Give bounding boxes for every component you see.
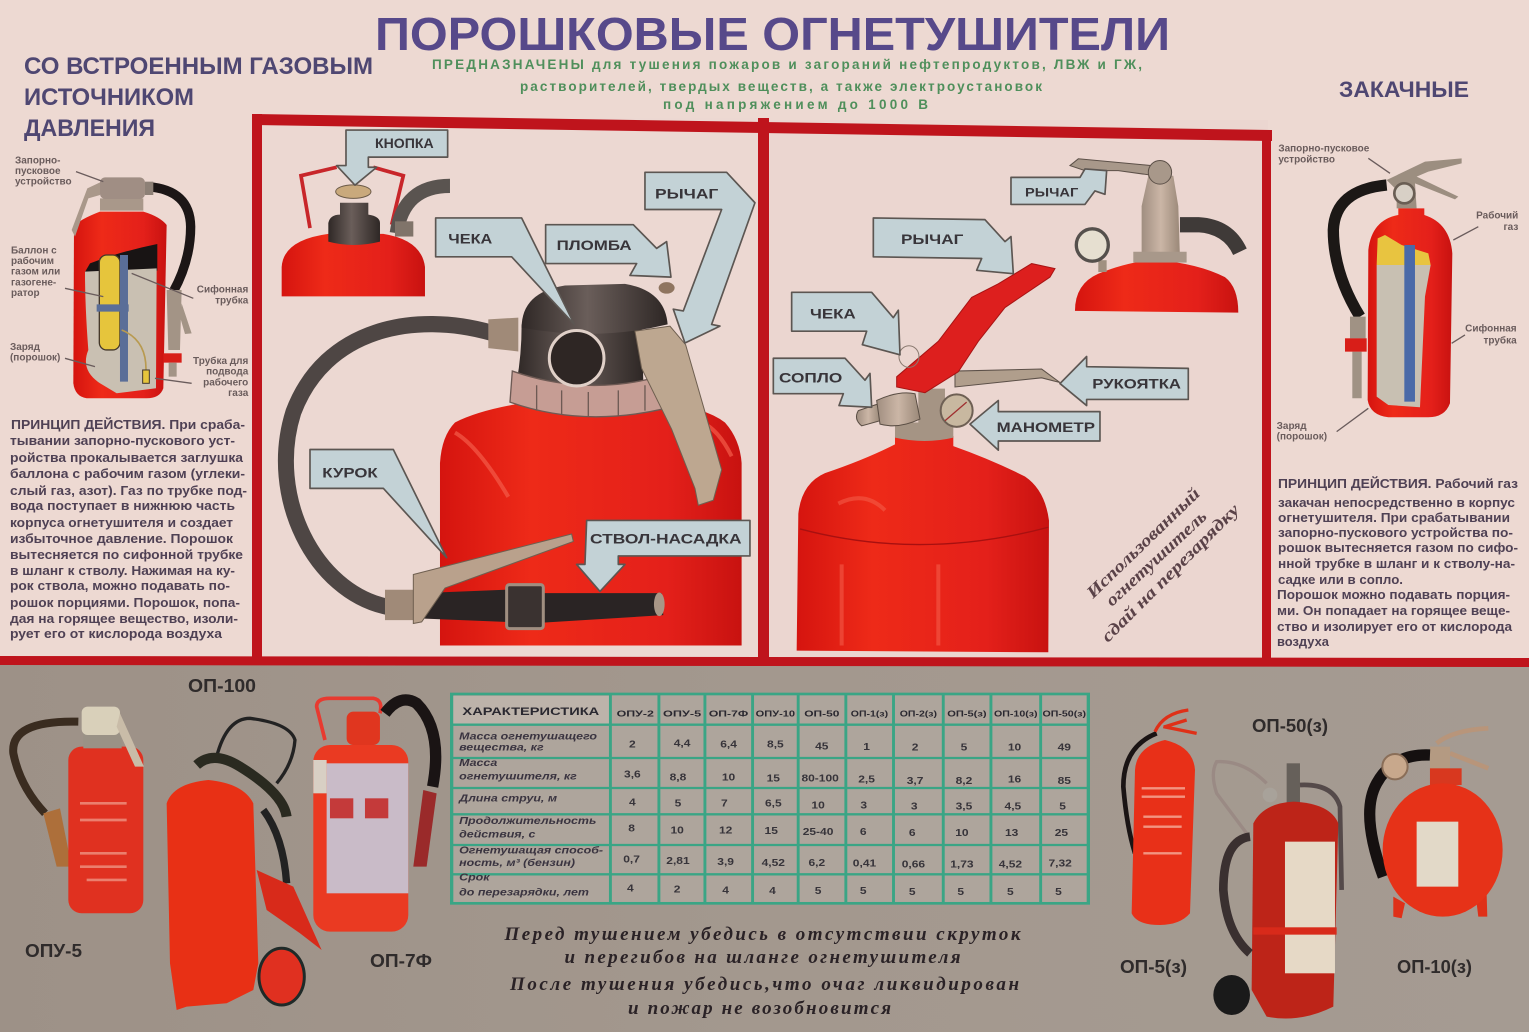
row: jet length: 7 bbox=[721, 799, 728, 809]
row: recharge period: 4 bbox=[627, 884, 634, 894]
row: extinguisher mass: 8,2 bbox=[956, 776, 972, 787]
labels: (порошок) bbox=[1277, 432, 1327, 443]
handle bbox=[955, 369, 1060, 387]
row: agent mass: 4,4 bbox=[674, 739, 690, 749]
panel: stored-cartridge extinguisher head bbox=[282, 130, 755, 646]
labels: рабочим bbox=[11, 255, 54, 267]
callout: сопло: СОПЛО bbox=[779, 370, 842, 386]
labels: left photos: ОПУ-5 bbox=[25, 941, 82, 961]
gas cylinder bbox=[99, 255, 120, 350]
labels: Рабочий bbox=[1476, 209, 1518, 221]
row: duration: 25-40 bbox=[803, 827, 833, 838]
principle text: left: корпуса огнетушителя и создает bbox=[10, 515, 233, 530]
warning text: Перед тушением убедись в отсутствии скруток bbox=[504, 924, 1022, 945]
table header: ОП-10(з) bbox=[994, 710, 1038, 719]
principle text: left: ройства прокалывается заглушка bbox=[10, 450, 244, 465]
labels bbox=[1277, 144, 1518, 443]
row: agent mass: Масса огнетушащего bbox=[459, 731, 597, 742]
callout: чека bbox=[436, 218, 574, 324]
purpose text bbox=[432, 57, 1142, 112]
principle text: right: ми. Он попадает на горящее веще- bbox=[1277, 603, 1510, 618]
principle text: left: рок ствола, можно подавать по- bbox=[10, 578, 230, 593]
row: agent mass: 49 bbox=[1058, 743, 1071, 753]
row: duration: 15 bbox=[765, 826, 778, 837]
table grid bbox=[452, 694, 1088, 903]
table header: ОП-50 bbox=[804, 710, 840, 719]
rotated note: Использованный bbox=[1082, 484, 1204, 603]
icon: hose bbox=[1333, 185, 1387, 317]
principle text: right: ство и изолирует его от кислорода bbox=[1277, 619, 1513, 634]
row: recharge period: 5 bbox=[860, 886, 867, 897]
title: ПОРОШКОВЫЕ ОГНЕТУШИТЕЛИ bbox=[375, 8, 1170, 60]
callout: пломба bbox=[546, 225, 671, 277]
principle text: left: ПРИНЦИП ДЕЙСТВИЯ. При сраба- bbox=[11, 417, 245, 432]
labels: пусковое bbox=[15, 166, 61, 177]
working gas bbox=[1377, 235, 1431, 265]
hose fittings bbox=[385, 318, 518, 620]
callout: пломба: ПЛОМБА bbox=[557, 238, 632, 253]
row: jet length: 5 bbox=[1059, 801, 1066, 812]
photo: ОП-5(з) bbox=[1123, 710, 1197, 925]
callout: манометр: МАНОМЕТР bbox=[997, 420, 1095, 435]
row: recharge period bbox=[459, 873, 1062, 898]
panel: center left background bbox=[258, 118, 762, 658]
head lower bbox=[517, 324, 643, 390]
characteristics table bbox=[452, 694, 1088, 903]
head and lever bbox=[72, 182, 143, 237]
heading: left type: ДАВЛЕНИЯ bbox=[24, 115, 155, 142]
row: capacity: ность, м³ (бензин) bbox=[459, 858, 575, 869]
labels: Запорно-пусковое bbox=[1278, 144, 1370, 155]
row: extinguisher mass: Масса bbox=[459, 758, 497, 769]
callout: манометр bbox=[970, 400, 1100, 450]
table header: ОП-5(з) bbox=[947, 710, 987, 719]
labels: right photos: ОП-10(з) bbox=[1397, 957, 1472, 977]
callout: кнопка: КНОПКА bbox=[375, 136, 434, 151]
labels: left photos: ОП-7Ф bbox=[370, 951, 432, 971]
principle text: left: вода поступает в нижнюю часть bbox=[10, 498, 235, 513]
labels: газогене- bbox=[11, 277, 56, 288]
row: agent mass: 5 bbox=[961, 743, 967, 753]
row: extinguisher mass bbox=[459, 758, 1071, 787]
table header: ХАРАКТЕРИСТИКА bbox=[462, 705, 599, 718]
collar and valve bbox=[895, 389, 953, 441]
row: duration: 10 bbox=[670, 825, 684, 836]
principle text: right: садке или в сопло. bbox=[1278, 572, 1403, 587]
labels: left photos: ОП-100 bbox=[188, 676, 256, 696]
table header: ОП-50(з) bbox=[1043, 710, 1086, 719]
table header: ОП-7Ф bbox=[709, 710, 748, 719]
row: capacity: 0,41 bbox=[853, 859, 876, 869]
row: jet length: 3,5 bbox=[956, 801, 972, 812]
seam bbox=[800, 527, 1048, 545]
principle text: right: рошок вытесняется газом по сифо- bbox=[1278, 540, 1518, 555]
principle text: right: нной трубке в шланг и к стволу-на- bbox=[1278, 556, 1515, 571]
warning text bbox=[504, 924, 1022, 1019]
leader lines bbox=[65, 172, 193, 383]
row: extinguisher mass: 80-100 bbox=[801, 774, 839, 784]
row: duration: 13 bbox=[1005, 828, 1018, 839]
collar ticks bbox=[537, 385, 645, 416]
labels: Запорно- bbox=[15, 155, 60, 166]
row: recharge period: 2 bbox=[674, 885, 680, 895]
nozzle bbox=[422, 590, 663, 623]
row: jet length: 3 bbox=[860, 800, 867, 811]
purpose text: растворителей, твердых веществ, а также электроустановок bbox=[520, 79, 1042, 94]
heading: left type: СО ВСТРОЕННЫМ ГАЗОВЫМ bbox=[24, 53, 373, 80]
extinguisher body bbox=[73, 212, 167, 398]
red lever bbox=[897, 264, 1055, 393]
highlights bbox=[838, 498, 938, 646]
row: jet length: 6,5 bbox=[765, 799, 782, 809]
callout: ствол-насадка bbox=[577, 520, 750, 591]
row: extinguisher mass: 10 bbox=[722, 773, 735, 783]
table header: ОП-1(з) bbox=[851, 710, 888, 719]
row: capacity bbox=[459, 845, 1072, 870]
collar bbox=[510, 371, 663, 417]
photo: ОП-7Ф bbox=[313, 698, 437, 932]
principle text: left: вытесняется по сифонной трубке bbox=[10, 547, 243, 562]
row: jet length: 5 bbox=[675, 799, 681, 809]
principle text: left: слый газ, азот). Газ по трубке под- bbox=[10, 483, 247, 498]
callout: рычаг bbox=[645, 172, 755, 343]
purpose text: под напряжением до 1000 В bbox=[663, 97, 928, 112]
labels: Заряд bbox=[10, 342, 41, 353]
row: extinguisher mass: 16 bbox=[1008, 775, 1021, 785]
left cutaway diagram bbox=[10, 155, 249, 399]
row: recharge period: 4 bbox=[769, 886, 776, 897]
photo: ОП-10(з) bbox=[1370, 728, 1503, 918]
row: extinguisher mass: 85 bbox=[1058, 776, 1071, 787]
principle text: right: запорно-пускового устройства по- bbox=[1278, 525, 1513, 540]
top small extinguisher bbox=[1070, 159, 1240, 313]
small extinguisher top bbox=[282, 167, 450, 296]
row: extinguisher mass: 3,7 bbox=[907, 776, 923, 787]
row: duration bbox=[459, 816, 1068, 840]
labels bbox=[10, 155, 249, 399]
row: jet length: 4 bbox=[629, 798, 636, 808]
principle text: left bbox=[10, 417, 247, 641]
labels: Сифонная bbox=[1465, 323, 1517, 335]
extinguisher body bbox=[1368, 208, 1452, 417]
black gas cavity bbox=[85, 244, 157, 272]
callout: чека bbox=[792, 292, 900, 355]
rotated note: огнетушитель bbox=[1102, 507, 1211, 610]
labels: right photos: ОП-50(з) bbox=[1252, 716, 1328, 736]
labels: газ bbox=[1504, 222, 1518, 233]
hose connector bbox=[1350, 317, 1366, 398]
row: extinguisher mass: 2,5 bbox=[858, 775, 875, 785]
row: agent mass: 45 bbox=[815, 741, 828, 752]
labels: ратор bbox=[11, 288, 40, 299]
row: capacity: 1,73 bbox=[950, 859, 974, 870]
row: capacity: 7,32 bbox=[1048, 859, 1072, 869]
row: agent mass: 2 bbox=[912, 743, 918, 753]
principle text: right: Порошок можно подавать порция- bbox=[1277, 587, 1510, 602]
principle text: right bbox=[1277, 476, 1519, 649]
body highlights bbox=[455, 422, 732, 497]
row: recharge period: Срок bbox=[459, 873, 491, 883]
safety pin loop bbox=[899, 346, 919, 367]
row: agent mass: 6,4 bbox=[720, 739, 737, 750]
labels: Заряд bbox=[1277, 421, 1307, 432]
row: capacity: 2,81 bbox=[666, 856, 690, 867]
labels: рабочего bbox=[203, 376, 248, 388]
gas feed tube bbox=[122, 330, 146, 371]
callout: чека: ЧЕКА bbox=[810, 306, 856, 321]
table header: ОПУ-5 bbox=[663, 710, 702, 719]
principle text: left: рует его от кислорода воздуха bbox=[10, 626, 223, 641]
row: jet length: 3 bbox=[911, 801, 918, 812]
row: jet length: Длина струи, м bbox=[458, 794, 558, 804]
row: capacity: 4,52 bbox=[999, 859, 1022, 870]
row: recharge period: 5 bbox=[909, 887, 916, 898]
row: duration: Продолжительность bbox=[459, 816, 597, 827]
row: jet length bbox=[458, 794, 1066, 812]
labels: (порошок) bbox=[10, 353, 60, 364]
row: agent mass: 2 bbox=[629, 739, 636, 750]
callout: рычаг top bbox=[1011, 169, 1107, 204]
table header bbox=[462, 705, 1086, 719]
warning text: и пожар не возобновится bbox=[628, 998, 892, 1019]
labels: трубка bbox=[1484, 334, 1517, 346]
seal bbox=[659, 282, 675, 294]
row: recharge period: 4 bbox=[722, 885, 729, 896]
row: agent mass: 10 bbox=[1008, 743, 1021, 753]
labels: right photos bbox=[1120, 716, 1472, 977]
big body bbox=[797, 436, 1049, 652]
lever and gauge bbox=[1387, 158, 1462, 208]
labels: устройство bbox=[15, 177, 72, 188]
callout: рукоятка bbox=[1060, 357, 1188, 406]
row: duration: 6 bbox=[909, 828, 916, 839]
safety ring bbox=[549, 331, 604, 386]
callout: сопло bbox=[773, 358, 872, 407]
row: jet length: 4,5 bbox=[1005, 801, 1021, 812]
head cap bbox=[522, 284, 668, 334]
principle text: left: тывании запорно-пускового уст- bbox=[10, 433, 235, 448]
rotated note: сдай на перезарядку bbox=[1097, 500, 1243, 646]
labels: устройство bbox=[1278, 154, 1335, 165]
panel: center right background bbox=[764, 120, 1268, 660]
callout: рычаг middle bbox=[873, 218, 1013, 274]
labels: Баллон с bbox=[11, 245, 57, 256]
powder charge bbox=[85, 268, 157, 393]
row: recharge period: 5 bbox=[1055, 887, 1062, 898]
principle text: right: ПРИНЦИП ДЕЙСТВИЯ. Рабочий газ bbox=[1278, 476, 1519, 491]
row: duration: 25 bbox=[1055, 828, 1068, 839]
callout: кнопка bbox=[337, 130, 448, 185]
row: agent mass: вещества, кг bbox=[459, 743, 544, 753]
callout: чека: ЧЕКА bbox=[448, 231, 493, 246]
bottom gray band bbox=[0, 660, 1529, 1032]
siphon tube bbox=[97, 255, 129, 382]
main body bbox=[440, 404, 742, 646]
hose connector bbox=[167, 290, 192, 350]
row: duration: 10 bbox=[955, 828, 969, 839]
row: recharge period: до перезарядки, лет bbox=[459, 887, 589, 898]
siphon tube bbox=[1404, 245, 1415, 402]
warning text: После тушения убедись,что очаг ликвидирован bbox=[509, 974, 1020, 995]
icon: hose bbox=[148, 187, 191, 292]
table header: ОПУ-2 bbox=[617, 710, 655, 719]
labels: left photos bbox=[25, 676, 432, 971]
callout: рычаг middle: РЫЧАГ bbox=[901, 232, 964, 247]
labels: Сифонная bbox=[197, 284, 248, 296]
callout: курок: КУРОК bbox=[322, 465, 379, 481]
rotated note bbox=[1082, 484, 1243, 646]
red frame bbox=[0, 114, 1529, 667]
labels: right photos: ОП-5(з) bbox=[1120, 957, 1187, 977]
row: agent mass: 8,5 bbox=[767, 739, 784, 750]
heading: right type: ЗАКАЧНЫЕ bbox=[1339, 77, 1469, 102]
row: recharge period: 5 bbox=[1007, 887, 1014, 898]
lever bbox=[635, 326, 722, 505]
principle text: left: дая на горящее вещество, изоли- bbox=[10, 611, 238, 626]
right cutaway diagram bbox=[1277, 144, 1518, 443]
callout: рукоятка: РУКОЯТКА bbox=[1092, 377, 1181, 392]
row: extinguisher mass: огнетушителя, кг bbox=[459, 771, 577, 782]
row: duration: 12 bbox=[719, 825, 732, 836]
table header: ОП-2(з) bbox=[900, 710, 937, 719]
heading: left type: ИСТОЧНИКОМ bbox=[24, 84, 194, 111]
row: capacity: 4,52 bbox=[762, 858, 785, 869]
row: duration: действия, с bbox=[459, 829, 536, 840]
row: jet length: 10 bbox=[811, 800, 825, 811]
row: extinguisher mass: 15 bbox=[767, 774, 780, 784]
photo: ОП-50(з) bbox=[1213, 762, 1342, 1019]
nozzle bbox=[856, 393, 920, 426]
warning text: и перегибов на шланге огнетушителя bbox=[564, 947, 962, 968]
principle text: right: закачан непосредственно в корпус bbox=[1278, 495, 1515, 510]
row: agent mass bbox=[459, 731, 1071, 753]
principle text: left: избыточное давление. Порошок bbox=[10, 531, 234, 546]
row: capacity: 6,2 bbox=[808, 858, 825, 869]
powder charge bbox=[1377, 265, 1431, 407]
row: duration: 6 bbox=[860, 827, 867, 838]
principle text: left: баллона с рабочим газом (углеки- bbox=[10, 466, 245, 481]
labels: трубка bbox=[215, 294, 249, 306]
row: recharge period: 5 bbox=[957, 887, 964, 898]
principle text: left: в шланг к стволу. Нажимая на ку- bbox=[10, 563, 235, 578]
row: capacity: Огнетушащая способ- bbox=[459, 845, 603, 856]
callout: ствол-насадка: СТВОЛ-НАСАДКА bbox=[590, 531, 742, 546]
labels: Трубка для bbox=[193, 355, 248, 367]
callout: рычаг top: РЫЧАГ bbox=[1025, 186, 1078, 200]
row: capacity: 3,9 bbox=[717, 857, 734, 868]
row: duration: 8 bbox=[628, 824, 635, 834]
row: capacity: 0,66 bbox=[902, 859, 925, 870]
photo: ОП-100 bbox=[167, 718, 322, 1010]
principle text: right: огнетушителя. При срабатывании bbox=[1278, 510, 1510, 525]
callout: курок bbox=[310, 449, 447, 558]
row: extinguisher mass: 8,8 bbox=[670, 773, 686, 783]
labels: газа bbox=[228, 388, 249, 399]
gauge bbox=[941, 394, 973, 427]
purpose text: ПРЕДНАЗНАЧЕНЫ для тушения пожаров и загораний нефтепродуктов, ЛВЖ и ГЖ, bbox=[432, 57, 1142, 72]
table header: ОПУ-10 bbox=[756, 710, 796, 719]
row: recharge period: 5 bbox=[815, 886, 821, 897]
row: capacity: 0,7 bbox=[623, 854, 640, 865]
principle text: left: рошок порциями. Порошок, попа- bbox=[10, 595, 240, 610]
labels: подвода bbox=[206, 367, 249, 378]
hose bbox=[286, 324, 492, 607]
principle text: right: воздуха bbox=[1277, 634, 1330, 649]
callout: рычаг: РЫЧАГ bbox=[655, 187, 719, 202]
row: agent mass: 1 bbox=[863, 742, 870, 753]
leader lines bbox=[1337, 158, 1478, 432]
trigger bbox=[413, 534, 573, 624]
panel: stored-pressure extinguisher head bbox=[773, 159, 1240, 652]
row: extinguisher mass: 3,6 bbox=[624, 769, 641, 780]
heading: left type bbox=[24, 53, 373, 142]
photo: ОПУ-5 bbox=[13, 707, 144, 913]
labels: газом или bbox=[11, 267, 60, 278]
